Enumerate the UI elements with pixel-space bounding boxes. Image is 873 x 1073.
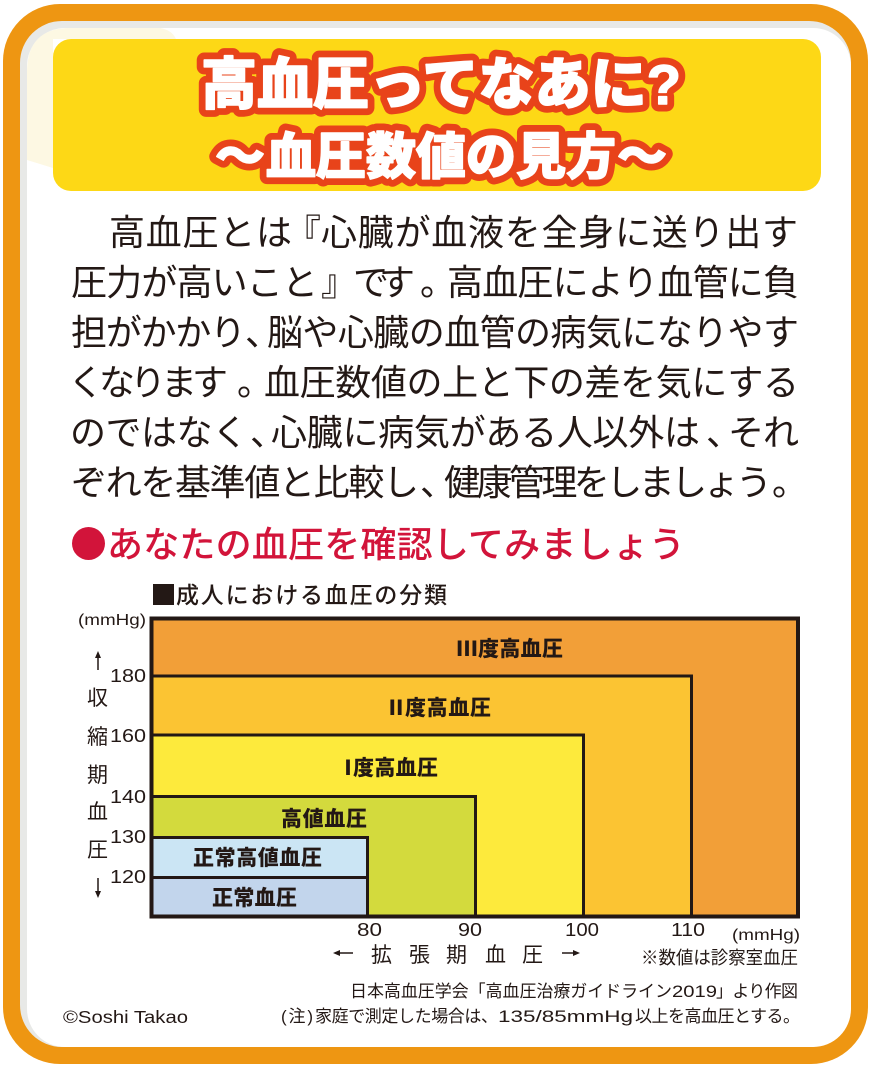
title: main heading: 高血圧ってなあに? (201, 53, 681, 116)
band: high normal: 高値血圧 (281, 807, 367, 831)
subtitle: 〜 (215, 129, 265, 185)
body paragraph: 圧力が高いこと (71, 262, 318, 303)
band: grade II: Ⅱ (386, 697, 406, 720)
blood pressure classification chart (152, 618, 798, 916)
y axis labels: 縮 (87, 726, 108, 749)
band: normal (152, 878, 368, 916)
body paragraph: ぞれを基準値と比較し (71, 462, 419, 503)
x axis labels: 110 (671, 920, 705, 940)
y axis labels: 130 (110, 827, 146, 847)
body paragraph: 担がかかり (71, 312, 246, 353)
y axis labels: 期 (87, 764, 108, 787)
body paragraph: 血圧数値の上と下の差を気にする (264, 362, 799, 403)
subtitle: 血圧数値の見方 (266, 129, 616, 185)
section heading: check your blood pressure: あなたの血圧を確認してみましょう (107, 524, 685, 565)
y axis labels: 収 (87, 687, 108, 710)
body paragraph: 』 (321, 262, 357, 303)
body paragraph: くなります (68, 362, 228, 403)
x axis labels: 拡張期血圧 (371, 944, 543, 967)
body paragraph (68, 212, 808, 503)
subtitle: 血圧数値の見方 (266, 129, 616, 185)
band: grade III: Ⅲ (456, 638, 478, 661)
footnote: (注) (281, 1007, 313, 1026)
subtitle: 〜 (215, 129, 265, 185)
band: high normal (152, 796, 476, 916)
body paragraph: 。 (772, 462, 808, 503)
x axis labels: 80 (357, 920, 382, 940)
x axis labels: 100 (565, 920, 599, 940)
body paragraph: 。 (420, 262, 456, 303)
subtitle: 〜 (617, 129, 667, 185)
y axis labels (78, 612, 146, 898)
body paragraph: 脳や心臓の血管の病気になりやす (267, 312, 799, 353)
body paragraph: 、 (706, 412, 742, 453)
copyright: ©Soshi Takao (63, 1007, 188, 1027)
body paragraph: 健康管理をしましょう (444, 462, 772, 503)
source note: 日本高血圧学会「高血圧治療ガイドライン (350, 982, 672, 1001)
band: normal: 正常血圧 (212, 887, 297, 910)
footnote: 以上を高血圧とする。 (635, 1007, 800, 1026)
footnote: 家庭で測定した場合は、 (315, 1007, 498, 1026)
body paragraph: 。 (237, 362, 273, 403)
body paragraph: 高血圧により血管に負 (447, 262, 799, 303)
band: grade III (152, 618, 798, 916)
body paragraph: 高血圧とは (109, 212, 292, 253)
band: grade I: Ⅰ (338, 757, 358, 780)
x axis labels: (mmHg) (732, 927, 800, 944)
chart title: 成人における血圧の分類 (176, 582, 447, 608)
body paragraph: 心臓が血液を全身に送り出す (321, 212, 798, 253)
body paragraph: それ (728, 412, 799, 453)
source note: 2019 (672, 982, 717, 1001)
y axis labels: 180 (110, 666, 146, 686)
body paragraph: です (353, 262, 415, 303)
band: normal high (152, 838, 368, 916)
source note: 」より作図 (716, 982, 798, 1001)
x axis labels (333, 920, 800, 968)
band: normal high: 正常高値血圧 (193, 846, 322, 870)
y axis labels: 120 (110, 867, 146, 887)
footnote (281, 1007, 800, 1026)
body paragraph: 心臓に病気がある人以外は (271, 412, 700, 453)
x axis labels: 90 (458, 920, 482, 940)
body paragraph: 、 (250, 412, 286, 453)
x axis labels: ※数値は診察室血圧 (641, 948, 798, 968)
y axis labels: 140 (110, 787, 146, 807)
title: main heading: 高血圧ってなあに? (201, 53, 681, 116)
y axis labels: (mmHg) (78, 612, 146, 629)
footnote: 135/85mmHg (498, 1007, 633, 1026)
title banner (53, 39, 821, 191)
body paragraph: 、 (245, 312, 281, 353)
y axis labels: 圧 (87, 839, 108, 862)
band: grade I (152, 735, 584, 916)
band: grade II (152, 676, 692, 916)
body paragraph: 、 (420, 462, 456, 503)
band: grade I: 度高血圧 (353, 756, 438, 780)
band: grade II: 度高血圧 (405, 696, 491, 720)
body paragraph: のではなく (70, 412, 248, 453)
y axis labels: 160 (110, 726, 146, 746)
band: grade III: 度高血圧 (478, 637, 563, 661)
body paragraph: 『 (285, 212, 321, 253)
y axis labels: 血 (87, 801, 108, 824)
subtitle: 〜 (617, 129, 667, 185)
